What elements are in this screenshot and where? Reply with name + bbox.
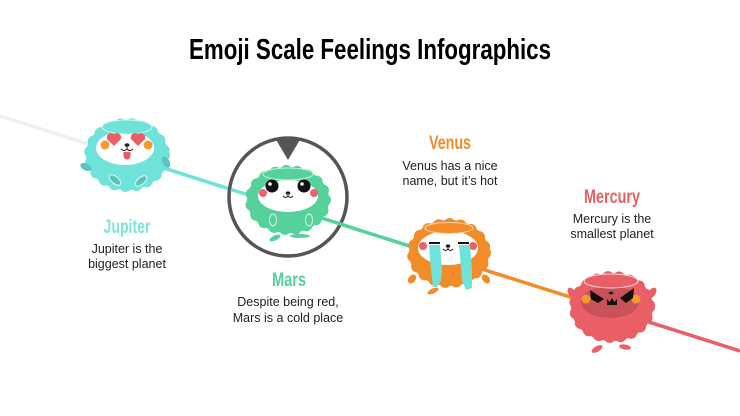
label: Venus: name, but it’s hot	[403, 174, 498, 188]
icon: Mars neutral emoji	[247, 167, 329, 243]
label: Venus: Venus has a nice	[402, 159, 498, 173]
label: Mercury	[570, 187, 654, 241]
scale line inside ring	[231, 190, 347, 226]
label: Jupiter: biggest planet	[88, 257, 166, 271]
label: Mercury: Mercury	[584, 187, 640, 208]
label: Jupiter	[88, 217, 166, 271]
label: Jupiter: Jupiter is the	[92, 242, 162, 256]
label: Mercury: smallest planet	[570, 227, 654, 241]
label: Venus	[402, 133, 498, 188]
selection ring with pointer	[229, 138, 347, 256]
icon: Venus crying emoji	[406, 220, 492, 296]
label: Jupiter: Jupiter	[104, 217, 151, 238]
label: Mars	[233, 270, 343, 325]
label: Venus: Venus	[429, 133, 471, 154]
icon: Mercury angry emoji	[566, 273, 658, 354]
label: Mars: Despite being red,	[237, 295, 339, 309]
label: Mars: Mars	[272, 270, 306, 291]
label: Mars: Mars is a cold place	[233, 311, 343, 325]
icon: Jupiter love emoji	[79, 120, 172, 190]
diagonal scale line	[0, 116, 740, 351]
label: Mercury: Mercury is the	[573, 212, 651, 226]
title: Emoji Scale Feelings Infographics	[189, 34, 551, 66]
